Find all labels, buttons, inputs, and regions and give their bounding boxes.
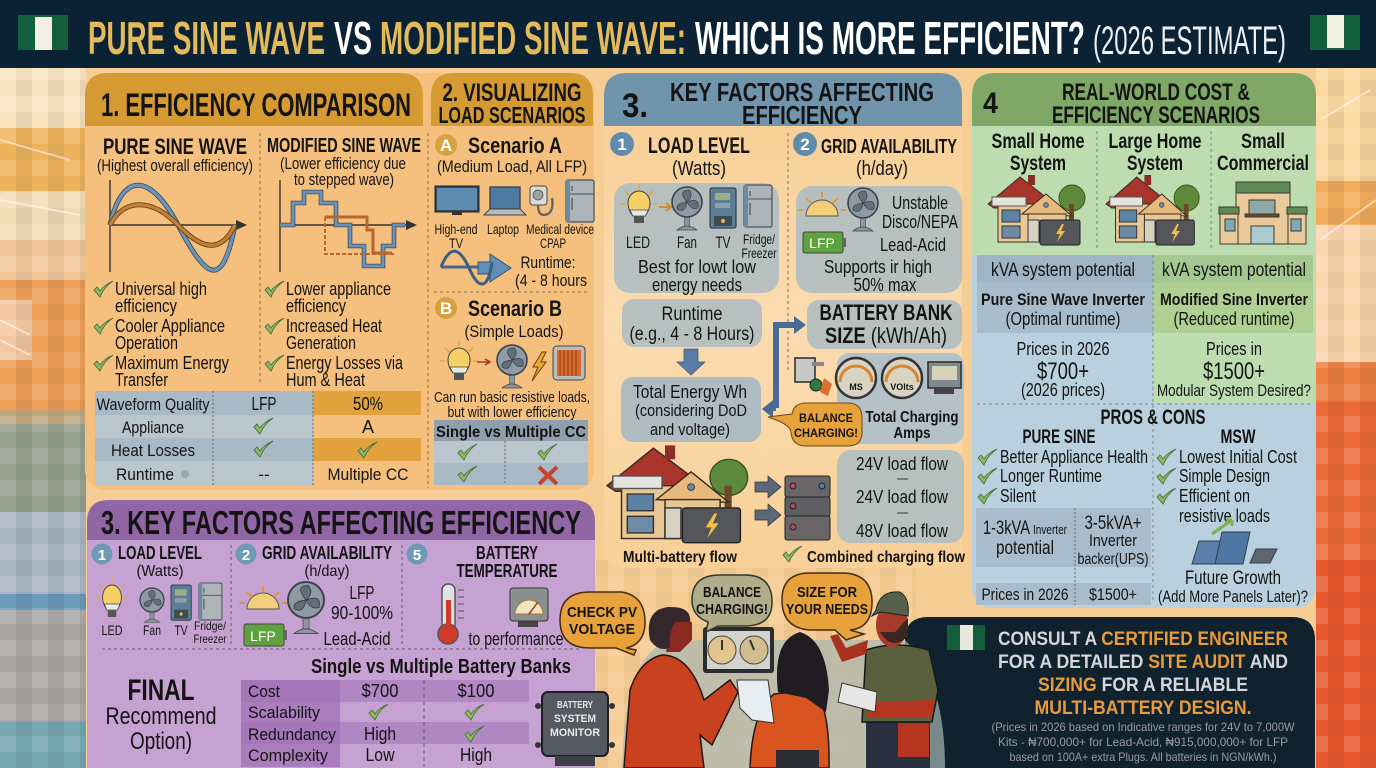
table: single vs multiple battery banks: High — [364, 724, 396, 744]
pros: MSW: MSW — [1220, 427, 1256, 448]
icon: heater — [553, 346, 585, 380]
text: future growth — [1158, 568, 1308, 606]
icon: fan — [497, 345, 527, 388]
heading: key factors: KEY FACTORS AFFECTING — [670, 77, 934, 107]
factor: load level: LOAD LEVEL — [118, 543, 202, 563]
call to action text: MULTI-BATTERY DESIGN. — [1034, 698, 1252, 719]
table: waveform comparison: Multiple CC — [328, 465, 408, 484]
panel: key factors affecting efficiency (top) — [604, 73, 965, 568]
list: modified sine drawbacks: Increased Heat — [286, 316, 382, 336]
pros: MSW: Lowest Initial Cost — [1179, 447, 1297, 467]
heading: visualizing load scenarios: 2. VISUALIZING — [442, 79, 582, 107]
scenario B: (Simple Loads) — [464, 322, 564, 341]
icon: medical device — [530, 186, 552, 215]
panel: efficiency comparison and load scenarios — [85, 73, 594, 490]
footnote: (Prices in 2026 based on Indicative ranges for 24V to 7,000W — [992, 720, 1295, 734]
icon: paper sheet — [737, 680, 774, 723]
figure: engineer — [830, 592, 938, 768]
table: modified sine inverter column: kVA system potential — [1162, 260, 1306, 281]
call to action text — [998, 629, 1288, 719]
icon: monitor device — [535, 692, 615, 766]
scenario A: (4 - 8 hours — [515, 271, 587, 290]
pros: MSW: resistive loads — [1179, 506, 1270, 526]
column: modified sine wave: to stepped wave) — [294, 170, 394, 189]
table: single vs multiple battery banks: $700 — [362, 681, 398, 701]
factor: load level: Fan — [143, 622, 161, 638]
factor: grid availability: (h/day) — [304, 563, 350, 580]
list: pure sine benefits: Transfer — [115, 370, 168, 390]
panel: real-world cost scenarios — [972, 73, 1316, 608]
table: kVA and prices: Prices in 2026 — [982, 585, 1068, 604]
table: single vs multiple battery banks — [241, 656, 571, 767]
factor 1: load level: Best for lowt low — [638, 257, 757, 277]
factor 2: grid availability: 2 — [800, 135, 810, 154]
table: waveform comparison: LFP — [252, 394, 276, 414]
scenario A: Runtime: — [520, 253, 576, 272]
heading: key factors: 3. — [622, 87, 648, 125]
icon: flag right — [1310, 15, 1360, 50]
factor: load level: 1 — [98, 547, 106, 564]
icon: TV — [435, 186, 479, 215]
list: modified sine drawbacks: Generation — [286, 333, 356, 353]
box: battery bank size: BATTERY BANK — [820, 300, 953, 325]
factor: grid availability: LFP — [250, 628, 276, 644]
footnote: Kits - ₦700,000+ for Lead-Acid, ₦915,000,000+ for LFP — [998, 735, 1288, 749]
table: pure sine inverter column: Pure Sine Wave Inverter — [981, 290, 1145, 309]
icon: tablet with dials — [703, 627, 774, 673]
callout: check PV voltage: CHECK PV — [567, 604, 637, 621]
list: pure sine benefits: efficiency — [115, 296, 177, 316]
figure: woman — [750, 632, 829, 768]
scenario A: Laptop — [487, 221, 519, 237]
figure: man — [624, 607, 738, 768]
pros: pure sine: PURE SINE — [1022, 427, 1096, 448]
footnote: based on 100A+ extra Plugs. All batteries in NGN/kWh.) — [1010, 750, 1276, 764]
caption: combined charging flow: Combined charging flow — [807, 549, 965, 566]
heading: efficiency comparison — [85, 73, 423, 126]
icon: gauge box — [510, 588, 548, 627]
icon: bulb — [440, 341, 478, 380]
table: modified sine inverter column: Modified Sine Inverter — [1160, 290, 1308, 309]
box: total energy: Total Energy Wh — [633, 382, 747, 402]
title text: VS — [334, 12, 372, 64]
scenario: small commercial — [1217, 130, 1309, 244]
scenario A: TV — [449, 235, 464, 251]
callout: balance charging: BALANCE — [799, 411, 853, 425]
table: waveform comparison: A — [362, 417, 374, 437]
list: modified sine drawbacks: Energy Losses via — [286, 353, 404, 373]
panel: key factors (purple) — [87, 500, 615, 768]
box: load flow: 48V load flow — [856, 521, 949, 541]
factor: grid availability: Lead-Acid — [324, 629, 390, 649]
factor: battery temperature: to performance — [468, 629, 564, 649]
factor: load level: LED — [102, 622, 122, 638]
factor: load level — [92, 543, 227, 646]
final recommendation: Recommend — [106, 703, 216, 730]
box: runtime — [622, 299, 762, 347]
column: modified sine wave — [265, 135, 421, 390]
column: pure sine wave: PURE SINE WAVE — [103, 134, 247, 159]
heading: EFFICIENCY SCENARIOS — [1052, 102, 1260, 129]
callout: size for your needs: SIZE FOR — [797, 584, 857, 601]
factor: load level: TV — [174, 622, 188, 638]
box: total energy: (considering DoD — [635, 401, 747, 420]
box: battery bank size — [807, 300, 962, 349]
factor: battery temperature: BATTERY — [476, 543, 538, 563]
pros: MSW — [1157, 427, 1297, 526]
icon: thermometer — [438, 584, 464, 644]
call to action text: CONSULT A CERTIFIED ENGINEER — [998, 629, 1288, 650]
final recommendation: Option) — [130, 728, 192, 755]
factor 2: grid availability: Unstable — [892, 193, 948, 213]
scenario: small home: Small Home — [992, 130, 1084, 153]
factor 1: load level: TV — [716, 233, 731, 252]
factor: grid availability: GRID AVAILABILITY — [262, 543, 392, 563]
list: pure sine benefits: Operation — [115, 333, 178, 353]
callout: balance charging: CHARGING! — [696, 601, 768, 618]
icon: flag left — [18, 15, 68, 50]
table: kVA and prices — [976, 508, 1151, 605]
box: battery bank size: SIZE (kWh/Ah) — [825, 323, 947, 348]
table: single vs multiple battery banks: High — [460, 745, 492, 765]
table: kVA and prices: backer(UPS) — [1078, 551, 1148, 568]
table: modified sine inverter column: (Reduced runtime) — [1174, 309, 1294, 329]
icon: solar panels — [1192, 520, 1277, 564]
scenario B: B — [440, 299, 452, 318]
callout: size for your needs — [782, 573, 872, 640]
scenario: large home — [1106, 130, 1202, 245]
icon: battery stack — [785, 476, 830, 540]
heading: 3. KEY FACTORS AFFECTING EFFICIENCY — [101, 504, 581, 541]
scenario B — [434, 296, 590, 421]
list: pure sine benefits: Universal high — [115, 279, 207, 299]
scenario: small commercial: Commercial — [1217, 152, 1309, 175]
heading: visualizing load scenarios — [431, 73, 593, 128]
factor: battery temperature: 5 — [413, 547, 421, 564]
list: modified sine drawbacks: Hum & Heat — [286, 370, 365, 390]
box: runtime: (e.g., 4 - 8 Hours) — [630, 324, 754, 345]
factor: load level: Fridge/ — [194, 619, 227, 633]
heading: REAL-WORLD COST & — [1062, 79, 1250, 106]
box: gauges and total charging amps: Total Charging — [866, 409, 958, 426]
scenario A: Medical device — [526, 221, 594, 237]
box: runtime: Runtime — [662, 304, 722, 325]
icon: laptop — [484, 187, 526, 215]
list: modified sine drawbacks: efficiency — [286, 296, 346, 316]
icon: flag — [947, 625, 985, 650]
table: waveform comparison: -- — [258, 465, 270, 484]
table: kVA and prices: $1500+ — [1089, 585, 1137, 604]
table: waveform comparison: Runtime — [116, 465, 174, 484]
callout: balance charging: CHARGING! — [794, 426, 858, 440]
chart: pure sine waveform — [110, 180, 247, 272]
factor 1: load level: 1 — [617, 135, 627, 154]
factor: grid availability: LFP — [350, 583, 374, 603]
heading: pros and cons: PROS & CONS — [1100, 406, 1206, 429]
pros: pure sine — [978, 427, 1148, 506]
box: load flow: 24V load flow — [856, 487, 949, 507]
list: pure sine benefits — [94, 279, 229, 390]
pros: pure sine: Longer Runtime — [1000, 466, 1102, 486]
icon: house with battery — [607, 445, 748, 543]
factor: load level: Freezer — [194, 632, 227, 646]
arrow: total energy to battery bank — [762, 316, 806, 418]
column: modified sine wave: MODIFIED SINE WAVE — [267, 135, 421, 157]
icon: monitor device: BATTERY — [557, 700, 593, 711]
list: modified sine drawbacks — [265, 279, 404, 390]
box: gauges and total charging amps — [795, 353, 964, 444]
icon: fridge — [566, 180, 594, 222]
column: pure sine wave — [94, 134, 253, 390]
factor 2: grid availability: Supports ir high — [824, 257, 932, 277]
factor 1: load level: Freezer — [742, 245, 777, 261]
scenario: large home: System — [1127, 152, 1183, 175]
box: load flow: 24V load flow — [856, 454, 949, 474]
factor 1: load level — [610, 132, 779, 295]
table: kVA and prices: Inverter — [1033, 522, 1068, 537]
icon: sun — [798, 192, 846, 216]
chart: stepped waveform — [280, 180, 417, 272]
title text: PURE SINE WAVE — [88, 12, 325, 64]
table: waveform comparison — [95, 391, 421, 485]
table: pure sine inverter column: (2026 prices) — [1021, 380, 1105, 400]
factor: grid availability: 2 — [242, 547, 250, 564]
table: pure sine inverter column: (Optimal runtime) — [1006, 309, 1120, 329]
title text: WHICH IS MORE EFFICIENT? — [695, 12, 1085, 64]
icon: monitor device: SYSTEM — [554, 713, 596, 725]
table: single vs multiple battery banks: Redundancy — [248, 725, 336, 744]
table: waveform comparison: 50% — [353, 394, 383, 414]
table: waveform comparison: Heat Losses — [111, 441, 195, 460]
pros: pure sine: Better Appliance Health — [1000, 447, 1148, 467]
factor 2: grid availability: 50% max — [854, 275, 916, 295]
factor 1: load level: Fridge/ — [743, 231, 775, 247]
table: single vs multiple CC: Single vs Multiple CC — [436, 424, 586, 441]
call to action text: FOR A DETAILED SITE AUDIT AND — [998, 652, 1288, 673]
table: single vs multiple battery banks: Single vs Multiple Battery Banks — [311, 656, 571, 678]
table: modified sine inverter column: Modular System Desired? — [1157, 381, 1311, 400]
pros: MSW: Simple Design — [1179, 466, 1270, 486]
icon: red cross — [539, 467, 557, 484]
call to action text: SIZING FOR A RELIABLE — [1038, 675, 1248, 696]
factor: grid availability: 90-100% — [331, 603, 393, 623]
icon: monitor device: MONITOR — [550, 727, 600, 739]
icon: gauge: VOlts — [890, 382, 914, 392]
icon: bolt — [532, 352, 546, 381]
icon: meter — [928, 362, 961, 394]
scenario: large home: Large Home — [1108, 130, 1202, 153]
scenario B: Can run basic resistive loads, — [434, 389, 590, 406]
final recommendation — [106, 674, 216, 755]
table: kVA and prices: Inverter — [1089, 531, 1137, 550]
scenario A: CPAP — [540, 235, 566, 251]
table: waveform comparison: Appliance — [122, 418, 184, 437]
callout: balance charging: BALANCE — [703, 584, 761, 601]
list: pure sine benefits: Cooler Appliance — [115, 316, 225, 336]
table: modified sine inverter column: $1500+ — [1203, 358, 1265, 385]
heading — [87, 500, 595, 541]
factor 2: grid availability: Lead-Acid — [880, 235, 946, 255]
table: single vs multiple battery banks: Low — [366, 745, 395, 765]
table: modified sine inverter column: Prices in — [1206, 339, 1262, 359]
scenario A: Scenario A — [468, 133, 562, 158]
icon: gauge — [882, 358, 922, 398]
box: total energy — [621, 377, 761, 442]
icon: wave arrow — [441, 251, 511, 284]
icon: gauge: MS — [849, 382, 863, 392]
text: future growth: Future Growth — [1185, 568, 1281, 589]
column: pure sine wave: (Highest overall efficiency) — [97, 156, 253, 175]
table: waveform comparison: Waveform Quality — [96, 395, 210, 414]
icon: LFP battery — [803, 232, 846, 253]
heading: key factors: EFFICIENCY — [742, 100, 862, 130]
box: load flow — [837, 450, 964, 543]
table: pure sine inverter column — [977, 255, 1153, 400]
list: pure sine benefits: Maximum Energy — [115, 353, 229, 373]
table: single vs multiple battery banks: Cost — [248, 682, 280, 701]
caption: multi-battery flow: Multi-battery flow — [623, 549, 737, 566]
scenario A: High-end — [434, 221, 478, 237]
heading: key factors — [604, 73, 962, 130]
scenario B: but with lower efficiency — [448, 404, 577, 421]
pros: MSW: Efficient on — [1179, 486, 1250, 506]
table: single vs multiple battery banks: Scalability — [248, 703, 320, 722]
illustration: people discussing — [560, 573, 945, 768]
panel: consult engineer call to action — [905, 617, 1315, 768]
scenario A: A — [440, 136, 452, 155]
factor 1: load level: LED — [626, 233, 650, 252]
callout: size for your needs: YOUR NEEDS — [786, 601, 868, 618]
callout: check PV voltage: VOLTAGE — [569, 621, 635, 638]
callout: balance charging — [692, 575, 772, 632]
heading — [972, 73, 1316, 129]
arrows: house to batteries — [755, 476, 781, 526]
text: future growth: (Add More Panels Later)? — [1158, 587, 1308, 606]
title text: MODIFIED SINE WAVE: — [380, 12, 686, 64]
icon: gauge — [836, 358, 876, 398]
list: modified sine drawbacks: Lower appliance — [286, 279, 391, 299]
column: modified sine wave: (Lower efficiency due — [280, 154, 406, 173]
factor 2: grid availability — [793, 132, 962, 295]
box: total energy: and voltage) — [650, 420, 730, 439]
factor 1: load level: energy needs — [652, 275, 742, 295]
table: single vs multiple CC — [434, 420, 588, 485]
callout: balance charging — [768, 403, 862, 446]
heading: 4 — [983, 87, 998, 120]
table: pure sine inverter column: Prices in 2026 — [1016, 339, 1110, 359]
arrow: down — [677, 349, 705, 375]
box: gauges and total charging amps: Amps — [894, 425, 931, 442]
caption: combined charging flow — [783, 546, 965, 566]
factor 1: load level: Fan — [677, 233, 697, 252]
scenario: small home: System — [1010, 152, 1066, 175]
icon: LFP battery: LFP — [809, 235, 835, 251]
factor 2: grid availability: (h/day) — [856, 158, 908, 180]
table: kVA and prices: 1-3kVA — [983, 518, 1030, 539]
icon: connector — [795, 358, 832, 396]
factor 2: grid availability: Disco/NEPA — [882, 212, 958, 232]
factor: battery temperature — [406, 543, 564, 649]
table: single vs multiple battery banks: $100 — [458, 681, 494, 701]
scenario A: (Medium Load, All LFP) — [437, 157, 587, 176]
table: pure sine inverter column: $700+ — [1037, 358, 1089, 385]
scenario A — [434, 133, 594, 290]
factor: grid availability — [236, 543, 393, 649]
footnote — [992, 720, 1295, 764]
final recommendation: FINAL — [128, 674, 194, 707]
factor 1: load level: LOAD LEVEL — [648, 133, 750, 158]
table: kVA and prices: 3-5kVA+ — [1084, 513, 1142, 534]
factor 2: grid availability: GRID AVAILABILITY — [821, 136, 957, 158]
icon: small arrow — [477, 359, 490, 365]
factor: load level: (Watts) — [136, 563, 184, 580]
pros: pure sine: Silent — [1000, 486, 1036, 506]
title text — [88, 12, 1286, 64]
heading: efficiency comparison: 1. EFFICIENCY COMPARISON — [101, 87, 411, 123]
factor: battery temperature: TEMPERATURE — [456, 561, 558, 581]
scenario: small home — [988, 130, 1085, 245]
scenario: small commercial: Small — [1241, 130, 1285, 153]
heading: visualizing load scenarios: LOAD SCENARIOS — [438, 102, 586, 128]
table: modified sine inverter column — [1153, 255, 1313, 400]
scenario B: Scenario B — [468, 296, 562, 321]
table: kVA and prices: potential — [996, 538, 1054, 559]
table: pure sine inverter column: kVA system potential — [991, 260, 1135, 281]
callout: check PV voltage — [560, 592, 645, 655]
factor 1: load level: (Watts) — [672, 158, 726, 180]
title banner — [0, 0, 1376, 68]
table: single vs multiple battery banks: Complexity — [248, 746, 328, 765]
